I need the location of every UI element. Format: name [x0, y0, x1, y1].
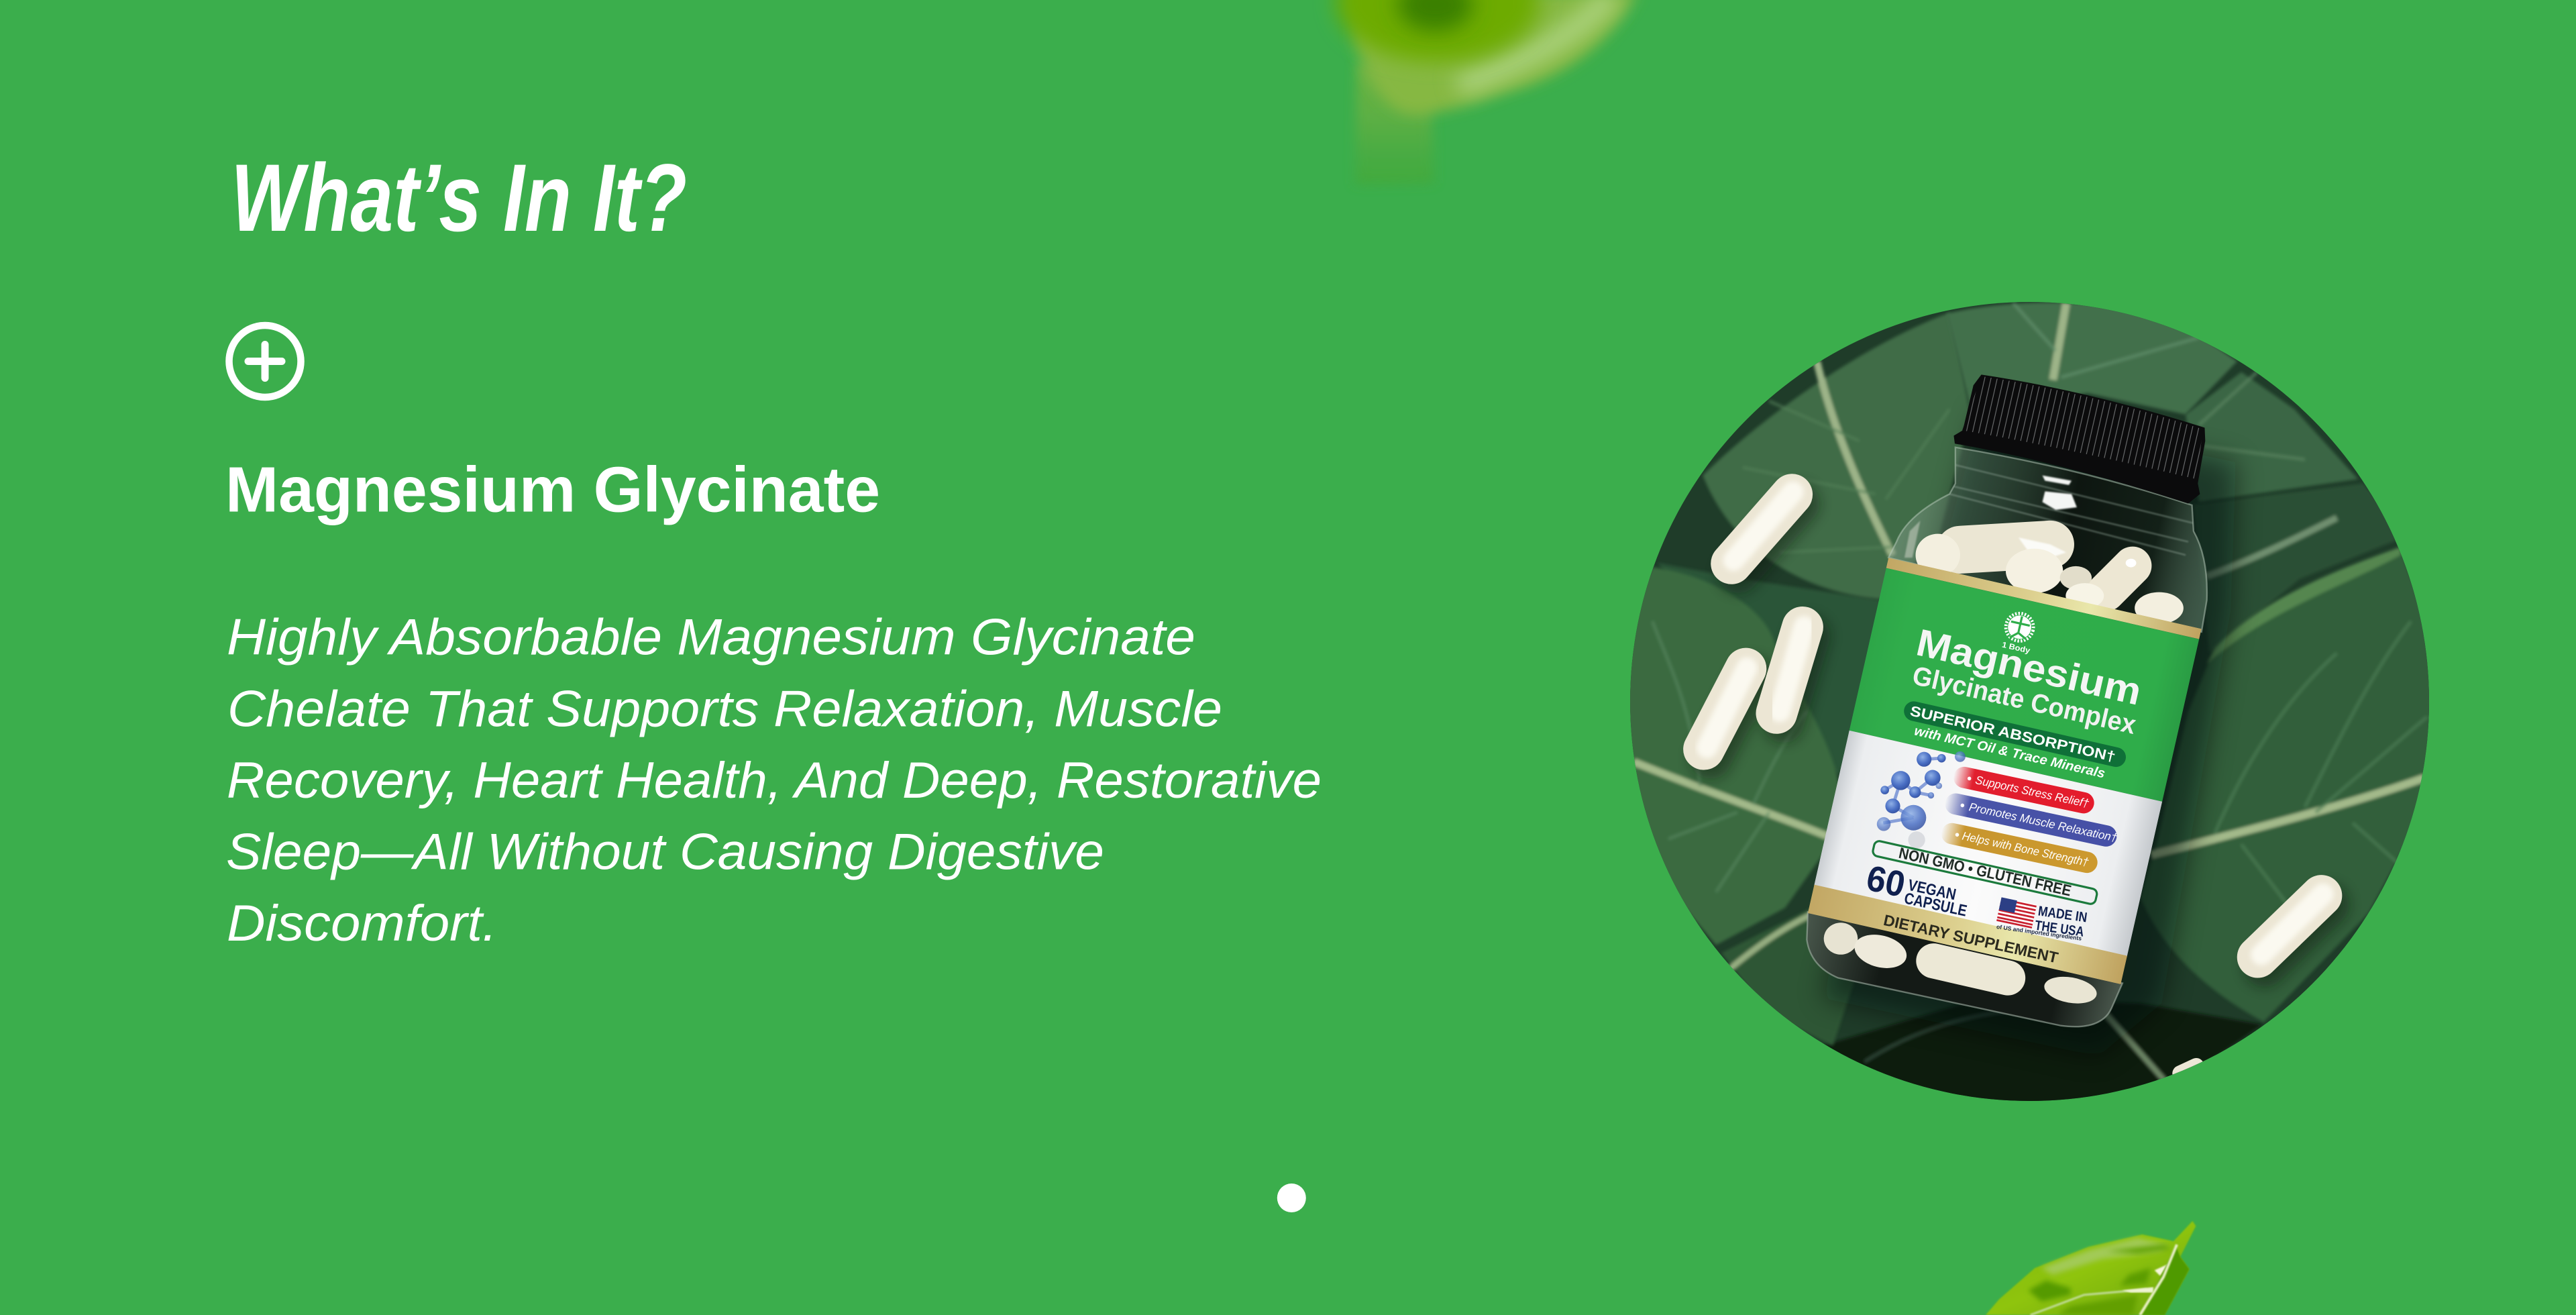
made in usa — [1996, 903, 2088, 942]
capsule count: 60 — [1863, 858, 1909, 905]
absorption pill: SUPERIOR ABSORPTION† — [1909, 703, 2117, 765]
leaf right large — [2141, 547, 2438, 1022]
capsule count — [1863, 858, 1968, 920]
benefit pill: blue: Promotes Muscle Relaxation† — [1968, 800, 2118, 845]
benefit pill: gold — [1939, 821, 2100, 875]
description text block: Chelate That Supports Relaxation, Muscle — [227, 680, 1222, 738]
brand logo — [2000, 611, 2038, 655]
glass jar upper — [1888, 448, 2207, 632]
leaf top left — [1703, 313, 1971, 599]
description text block: Sleep—All Without Causing Digestive — [226, 824, 1104, 880]
absorption pill — [1902, 699, 2128, 769]
bottle shadow — [1822, 409, 2236, 1057]
product subtitle: Glycinate Complex — [1910, 661, 2139, 740]
benefit pill: red — [1951, 765, 2096, 815]
usa flag — [1996, 897, 2037, 929]
made in usa: THE USA — [2034, 918, 2085, 940]
description text block: Discomfort. — [227, 895, 497, 952]
benefit pill: blue — [1943, 792, 2119, 849]
icon: plus in circle — [229, 325, 301, 397]
leaf top centre — [1947, 303, 2237, 415]
capsule count: CAPSULE — [1902, 890, 1968, 920]
title: What’s In It? — [231, 145, 687, 252]
leaf lower left — [1721, 908, 1854, 1046]
cap — [1953, 374, 2206, 503]
capsules inside jar — [1916, 534, 2184, 624]
bottle — [1807, 367, 2215, 1027]
made in usa: of US and imported ingredients — [1996, 923, 2082, 942]
non gmo box: NON GMO • GLUTEN FREE — [1897, 844, 2073, 900]
pagination dot — [1277, 1184, 1306, 1212]
molecule graphic — [1877, 751, 1966, 849]
description text block — [226, 609, 1322, 952]
oil note: with MCT Oil & Trace Minerals — [1913, 724, 2106, 782]
benefit pill: red: Supports Stress Relief† — [1974, 773, 2090, 810]
benefit pill: gold: Helps with Bone Strength† — [1961, 829, 2090, 869]
ingredient heading: Magnesium Glycinate — [225, 454, 880, 526]
glass jar base — [1807, 912, 2123, 1027]
description text block: Recovery, Heart Health, And Deep, Restorative — [227, 752, 1322, 809]
capsule count: VEGAN — [1907, 877, 1957, 904]
made in usa: MADE IN — [2037, 903, 2088, 925]
photo base — [1610, 282, 2442, 1114]
leaf left — [1626, 567, 1839, 945]
leaf top right — [2186, 372, 2358, 502]
product photo in circle — [1630, 302, 2429, 1101]
blurred leaf, top — [1326, 0, 1641, 184]
dietary supplement: DIETARY SUPPLEMENT — [1882, 911, 2060, 966]
dark back leaves — [1658, 484, 2406, 1110]
sharp leaf, bottom — [1986, 1221, 2196, 1315]
bottle label — [1808, 558, 2202, 984]
brand logo: 1 Body — [2001, 640, 2031, 655]
description text block: Highly Absorbable Magnesium Glycinate — [227, 609, 1195, 666]
loose capsules — [1704, 492, 2328, 1073]
product name: Magnesium — [1913, 621, 2145, 714]
